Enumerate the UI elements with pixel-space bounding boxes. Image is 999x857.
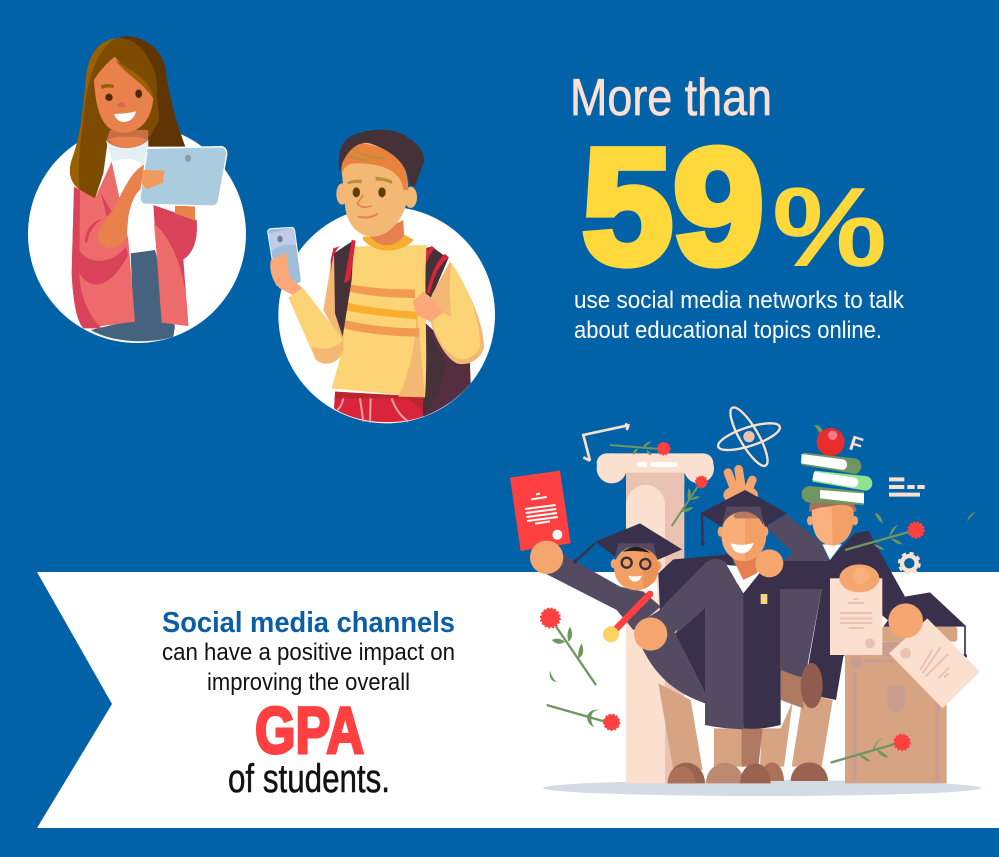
legs <box>792 693 833 767</box>
banner body lines <box>162 639 455 696</box>
books and apple <box>802 453 861 474</box>
back graduate <box>760 425 976 783</box>
ground shadow <box>543 780 981 796</box>
podium <box>845 592 967 783</box>
column <box>597 453 714 783</box>
statistic: 59%: 59 <box>582 115 764 298</box>
description text <box>574 287 905 344</box>
left graduate <box>530 523 733 783</box>
banner text <box>162 607 455 801</box>
red diploma <box>510 471 571 551</box>
heading: More than: More than <box>570 69 772 127</box>
medal <box>615 594 650 630</box>
gear icon <box>902 556 917 571</box>
illustration: graduates <box>510 403 981 796</box>
banner body lines: improving the overall <box>207 669 410 696</box>
letter F: F <box>846 432 866 457</box>
GPA highlight: GPA <box>255 693 364 767</box>
description text: about educational topics online. <box>574 317 882 344</box>
icon: set square <box>583 424 628 461</box>
illustration: woman with tablet <box>28 36 246 343</box>
illustration: boy with phone and backpack <box>268 130 495 423</box>
head <box>807 516 813 525</box>
documents and hands <box>830 564 980 708</box>
flower on podium <box>831 744 895 763</box>
banner heading: Social media channels <box>162 607 455 639</box>
closing line: of students. <box>228 757 390 801</box>
icon: text lines <box>889 479 925 495</box>
flowers on column <box>610 442 707 526</box>
statistic: 59%: % <box>772 164 887 290</box>
flowers on ground <box>541 609 619 730</box>
gown <box>781 588 822 678</box>
statistic: 59% <box>582 115 887 298</box>
white arrow banner <box>37 572 999 828</box>
atom icon <box>715 403 783 470</box>
description text: use social media networks to talk <box>574 287 905 314</box>
raised hand <box>723 469 758 505</box>
middle graduate <box>634 469 787 783</box>
banner body lines: can have a positive impact on <box>162 639 455 666</box>
flower near head <box>845 532 910 550</box>
